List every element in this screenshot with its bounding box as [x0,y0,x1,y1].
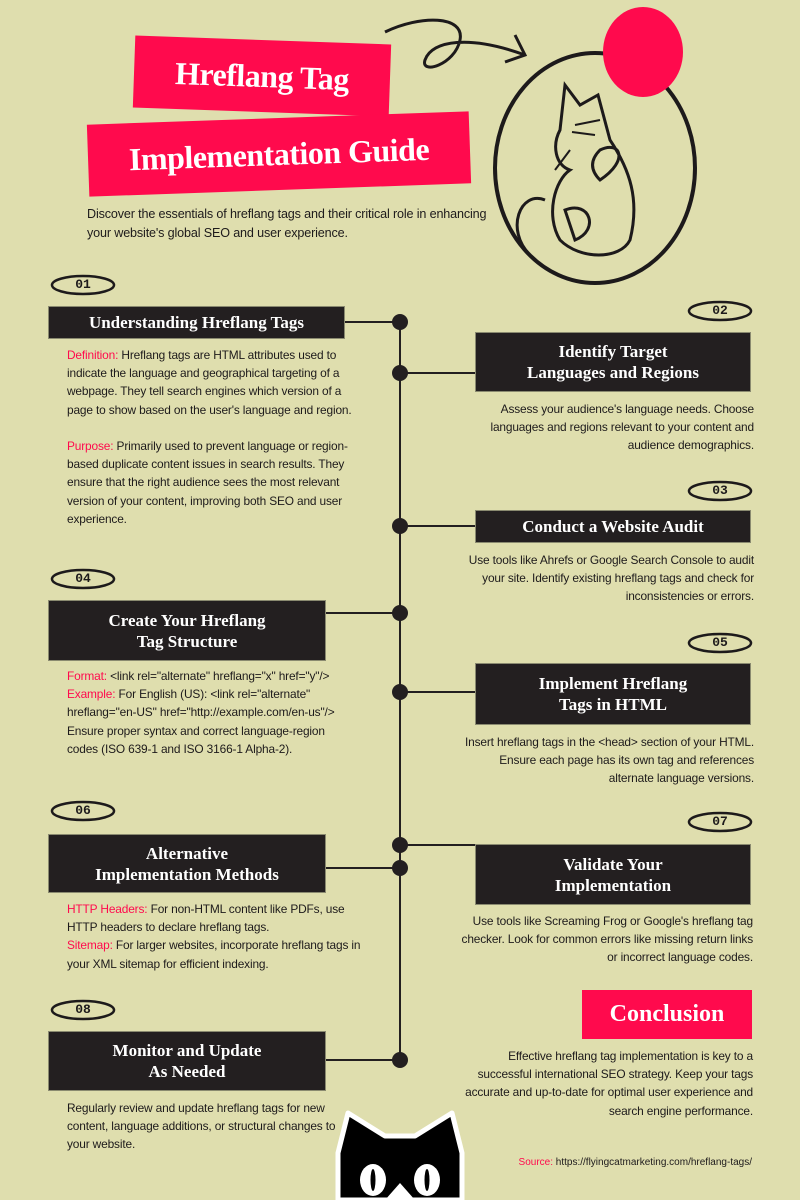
panel 8 text: Regularly review and update hreflang tags for new content, language additions, or structural changes to your website. [67,1101,335,1151]
conclusion text: Effective hreflang tag implementation is key to a successful international SEO strategy. Keep your tags accurate and up-to-date for optimal user experience and search engine performance. [465,1049,753,1118]
panel 5 text: Insert hreflang tags in the <head> section of your HTML. Ensure each page has its own tag and references alternate language versions. [465,735,754,785]
badge 08: 08 [75,1002,91,1017]
title box 1: Hreflang Tag [174,55,350,97]
panel 8 heading [48,1031,326,1091]
icon: arrow and cat illustration [384,7,697,285]
panel 6 heading [48,834,326,893]
panel 2 heading [475,332,751,392]
panel 2 text: Assess your audience's language needs. Choose languages and regions relevant to your content and audience demographics. [490,402,754,452]
panel 1 heading: Understanding Hreflang Tags [89,313,304,332]
panel 5 heading: Implement Hreflang [539,674,687,693]
badge 07: 07 [712,814,728,829]
panel 6 text: Sitemap: For larger websites, incorporate hreflang tags in your XML sitemap for efficient indexing. [67,938,360,971]
panel 1 text [67,348,352,526]
subtitle: Discover the essentials of hreflang tags and their critical role in enhancing your website's global SEO and user experience. [87,207,486,240]
icon: bottom cat head [336,1110,464,1200]
panel 8 heading: Monitor and Update [113,1041,261,1060]
badge 04: 04 [75,571,91,586]
badge 03 [688,480,752,502]
badge 07 [688,812,752,832]
badge 04 [50,568,116,590]
badge 01: 01 [75,277,91,292]
panel 6 heading: Implementation Methods [95,864,279,884]
panel 1 text: Definition: Hreflang tags are HTML attributes used to indicate the language and geographical targeting of a webpage. They tell search engines which version of a page to show based on the user's language and region. [67,348,352,417]
panel 5 heading [475,663,751,725]
badge 08 [50,1000,116,1020]
panel 3 heading: Conduct a Website Audit [522,517,704,536]
panel 4 text: Example: For English (US): <link rel="alternate" hreflang="en-US" href="http://example.com/en-us"/> [67,687,334,719]
badge 05 [688,632,752,654]
panel 4 heading: Tag Structure [137,632,237,650]
conclusion heading [582,990,752,1039]
panel 1 heading [48,306,345,339]
panel 7 heading [475,844,751,905]
panel 4 heading: Create Your Hreflang [108,610,266,630]
panel 4 text: Format: <link rel="alternate" hreflang="x" href="y"/> [67,669,329,683]
title box 1 [133,36,391,116]
badge 05: 05 [712,635,728,650]
conclusion heading: Conclusion [610,1001,724,1027]
source: Source: https://flyingcatmarketing.com/hreflang-tags/ [519,1157,752,1168]
panel 7 heading: Implementation [555,876,671,894]
panel 6 heading: Alternative [146,844,228,862]
badge 06: 06 [75,803,91,818]
panel 4 text [67,669,334,756]
badge 02: 02 [712,303,728,318]
panel 5 heading: Tags in HTML [559,695,667,714]
panel 3 text: Use tools like Ahrefs or Google Search Console to audit your site. Identify existing hreflang tags and check for inconsistencies or errors. [469,553,754,603]
panel 4 heading [48,600,326,661]
panel 6 text [67,902,360,971]
panel 4 text: Ensure proper syntax and correct language-region codes (ISO 639-1 and ISO 3166-1 Alpha-2). [67,724,325,756]
panel 7 heading: Validate Your [563,854,663,874]
panel 6 text: HTTP Headers: For non-HTML content like PDFs, use HTTP headers to declare hreflang tags. [67,902,344,934]
panel 7 text: Use tools like Screaming Frog or Google's hreflang tag checker. Look for common errors like missing return links or incorrect language codes. [462,914,753,964]
panel 2 heading: Languages and Regions [527,363,699,382]
panel 8 heading: As Needed [149,1062,225,1081]
badge 06 [50,800,116,822]
badge 01 [50,274,116,296]
panel 2 heading: Identify Target [558,342,668,361]
panel 1 text: Purpose: Primarily used to prevent language or region-based duplicate content issues in search results. They ensure that the right audience sees the most relevant version of your content, improving both SEO and user experience. [67,439,348,526]
timeline line [399,322,401,1060]
panel 3 heading [475,510,751,543]
badge 03: 03 [712,483,728,498]
title box 2 [87,111,471,197]
title box 2: Implementation Guide [128,131,430,177]
badge 02 [688,300,752,322]
